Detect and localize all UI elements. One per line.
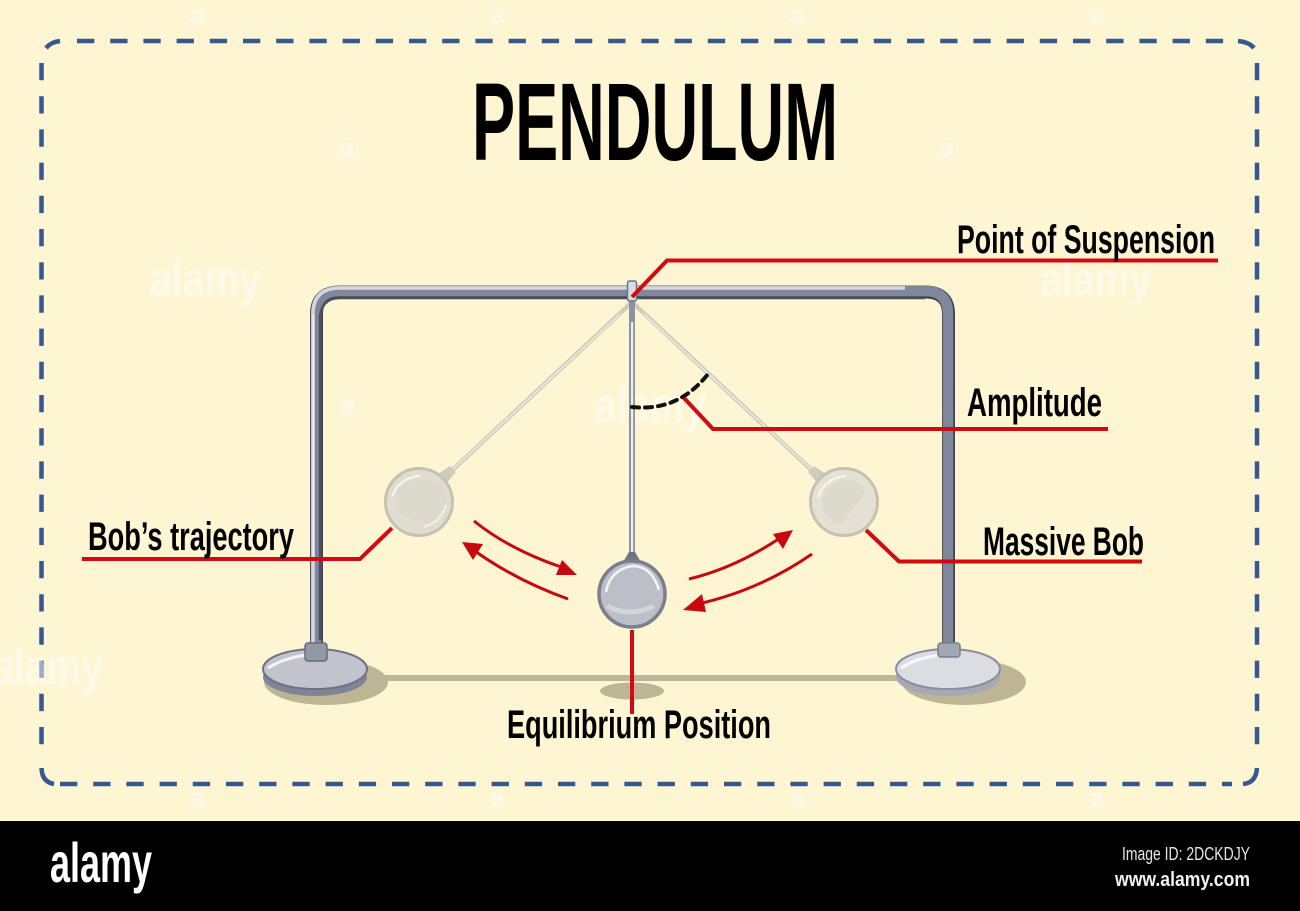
image id: Image ID: 2DCKDJY (1122, 844, 1250, 864)
label: equilibrium position: Equilibrium Position (507, 703, 771, 747)
watermarks (0, 0, 1151, 812)
right swing rod (634, 304, 826, 484)
floor shadows (264, 659, 1026, 705)
footer bar (0, 821, 1300, 911)
leader: massive bob (866, 530, 1142, 562)
watermarks: a (190, 0, 205, 30)
leader: amplitude (684, 398, 1108, 429)
left faded bob (386, 468, 452, 536)
watermarks: a (490, 782, 505, 812)
amplitude dashed arc (632, 374, 708, 408)
watermarks: a (1090, 0, 1105, 30)
watermarks: a (790, 0, 805, 30)
watermarks: a (940, 390, 955, 420)
watermarks: a (190, 782, 205, 812)
arrow: left bob to centre (474, 521, 577, 575)
label: bob's trajectory: Bob’s trajectory (88, 515, 295, 559)
right faded bob (810, 468, 878, 536)
arrow: centre to right bob (689, 530, 793, 579)
left base (263, 643, 367, 696)
left swing rod (438, 304, 630, 484)
watermarks: alamy (1040, 251, 1151, 307)
label: amplitude: Amplitude (967, 381, 1102, 425)
watermarks: a (340, 132, 355, 162)
watermarks: alamy (150, 251, 261, 307)
watermarks: a (340, 390, 355, 420)
right base (896, 643, 1000, 696)
leader: equilibrium position (630, 630, 634, 714)
watermarks: a (490, 0, 505, 30)
arrow: right bob to centre (683, 554, 812, 612)
label: massive bob: Massive Bob (983, 520, 1144, 564)
centre rod (622, 298, 642, 564)
pendulum frame (313, 288, 948, 650)
watermarks: alamy (595, 377, 706, 433)
footer logo: alamy (50, 831, 152, 894)
title: PENDULUM (472, 61, 838, 184)
point of suspension clamp (628, 281, 636, 301)
watermarks: a (940, 132, 955, 162)
centre bob (599, 561, 665, 627)
leader: point of suspension (632, 260, 1218, 297)
watermarks: a (790, 782, 805, 812)
panel: dashed border (42, 41, 1257, 784)
website: www.alamy.com (1114, 869, 1250, 891)
arrow: centre to left bob (462, 542, 568, 599)
leader: bob's trajectory (82, 528, 392, 559)
watermarks: a (1090, 782, 1105, 812)
